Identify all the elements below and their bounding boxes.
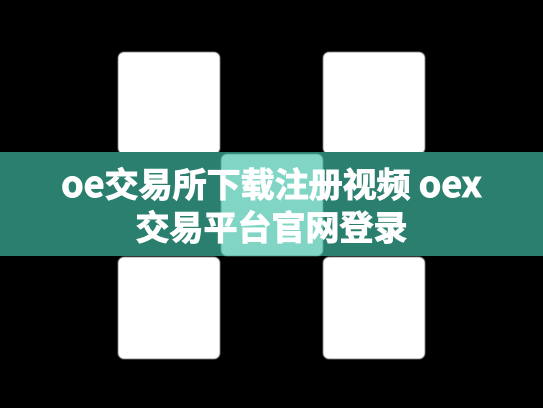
icon tile: top left [118,52,220,154]
icon tile: center [221,154,323,256]
icon tile: bottom right [323,257,425,359]
title: oe交易所下载注册视频 oex [61,156,482,208]
icon tile: bottom left [118,257,220,359]
title: 交易平台官网登录 [136,201,408,250]
title band [0,152,543,256]
title [61,156,482,250]
icon tile: top right [323,52,425,154]
